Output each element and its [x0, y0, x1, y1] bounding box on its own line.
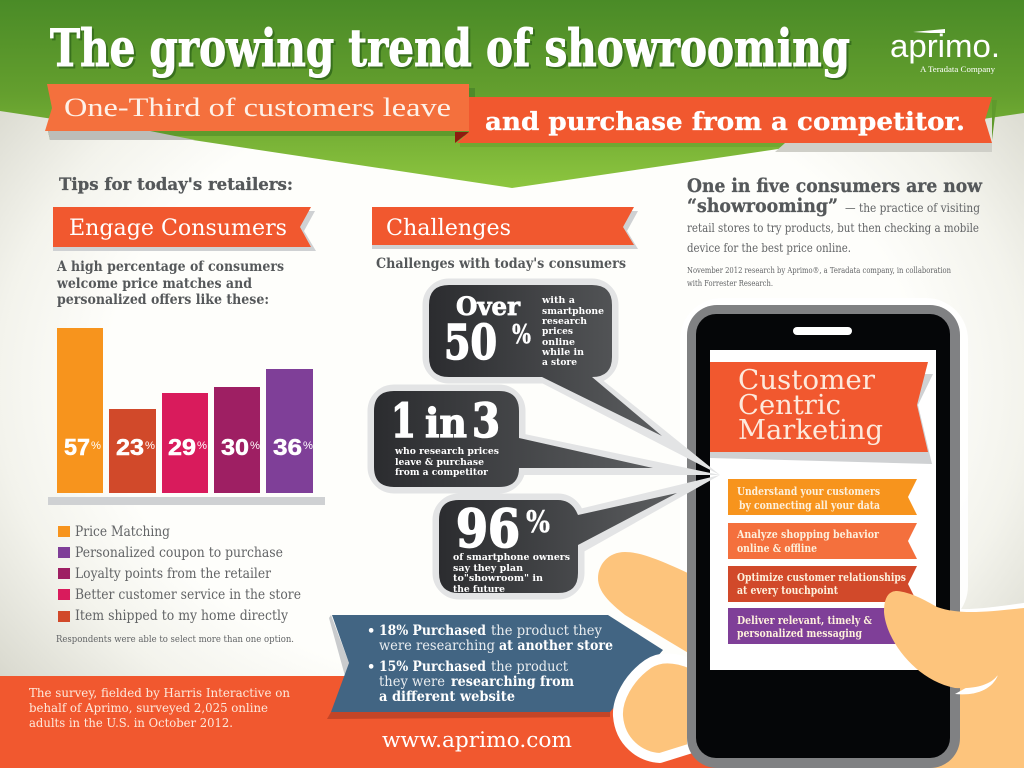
list item: deliver relevant messaging [728, 608, 917, 644]
logo: aprimo: aprimo. [890, 28, 1000, 64]
bar chart [48, 328, 325, 505]
hand: index finger [598, 552, 690, 654]
survey note: The survey, fielded by Harris Interactive on [29, 685, 290, 700]
blue callout: • [367, 624, 375, 639]
website: www.aprimo.com [382, 728, 572, 752]
banner: customer centric marketing [710, 362, 933, 464]
banner: and purchase from a competitor [455, 97, 997, 152]
subheading: challenges: Challenges with today's consumers [376, 256, 626, 272]
list item: analyze shopping behavior [728, 523, 917, 559]
text: engage intro [56, 259, 284, 308]
text: engage intro: personalized offers like these: [57, 292, 269, 308]
bar: 36%: 36 [273, 434, 302, 460]
heading: tips for retailers: Tips for today's retailers: [59, 175, 293, 195]
list item: optimize customer relationships: Optimize customer relationships [737, 571, 906, 584]
bubble: over 50%: smartphone [542, 306, 604, 317]
banner: customer centric marketing: Centric [738, 390, 841, 421]
hand: thumb [884, 591, 1024, 694]
bubble: over 50%: a store [542, 357, 577, 368]
phone screen [710, 350, 936, 670]
phone speaker [793, 327, 852, 335]
blue callout: the product they [491, 623, 602, 639]
logo: aprimo: A Teradata Company [920, 65, 995, 74]
bar: 29% [162, 393, 208, 493]
blue callout: the product [491, 659, 569, 675]
banner: customer centric marketing: Customer [738, 365, 875, 396]
banner: engage consumers: Engage Consumers [69, 216, 287, 241]
bubble: over 50%: Over [456, 292, 521, 321]
bar: 23%: % [145, 440, 155, 452]
list item: optimize customer relationships: at every touchpoint [737, 584, 839, 597]
blue callout: 18% Purchased [379, 623, 487, 639]
legend [58, 524, 301, 624]
bubble: over 50%: % [512, 320, 531, 350]
bubble: 1 in 3: who research prices [394, 446, 499, 457]
legend: Price Matching [75, 524, 170, 540]
bar: 57%: % [91, 440, 101, 452]
blue callout: were researching [379, 638, 495, 654]
list item: understand your customers: by connecting all your data [739, 499, 880, 512]
legend: Better customer service in the store [75, 587, 301, 603]
list item: deliver relevant messaging: Deliver relevant, timely & [737, 614, 872, 627]
blue callout: 15% Purchased [379, 659, 487, 675]
list item: optimize customer relationships [728, 566, 917, 602]
bar: 30%: 30 [221, 434, 249, 460]
intro: one in five [687, 175, 983, 289]
bubble: over 50%: research [542, 316, 587, 327]
intro: one in five: with Forrester Research. [687, 279, 773, 289]
list item: understand your customers [728, 479, 917, 515]
bubble: over 50%: 50 [444, 315, 497, 371]
intro: one in five: — the practice of visiting [845, 200, 980, 215]
banner: engage consumers [53, 207, 316, 251]
banner: customer centric marketing: Marketing [738, 415, 883, 446]
intro: one in five: “showrooming” [687, 195, 838, 217]
bar: 36%: % [303, 440, 313, 452]
bubble: over 50%: while in [541, 347, 584, 358]
bubble: over 50%: prices [542, 326, 573, 337]
blue callout: researching from [451, 674, 574, 690]
blue callout [327, 615, 663, 719]
text: engage intro: welcome price matches and [56, 276, 253, 292]
blue callout: a different website [379, 689, 515, 705]
intro: one in five: November 2012 research by Aprimo®, a Teradata company, in collaboration [687, 266, 951, 276]
blue callout: at another store [499, 638, 613, 654]
bar: 23%: 23 [116, 434, 144, 460]
bar: 23% [109, 409, 156, 493]
list item: deliver relevant messaging: personalized messaging [737, 627, 862, 640]
bar: 36% [266, 369, 313, 493]
text: engage intro: A high percentage of consumers [56, 259, 284, 275]
bar: 57%: 57 [64, 434, 90, 460]
list item: analyze shopping behavior: online & offline [737, 542, 817, 555]
bubble tails outline [515, 378, 720, 555]
bubble: 1 in 3: from a competitor [395, 467, 489, 478]
bubble: 96%: 96 [456, 499, 520, 560]
survey note: adults in the U.S. in October 2012. [29, 715, 233, 730]
bubble: 1 in 3: 3 [472, 394, 500, 449]
list item: understand your customers: Understand your customers [737, 485, 880, 498]
bar: 29%: 29 [168, 434, 196, 460]
banner: one-third of customers leave [45, 84, 475, 140]
list item: analyze shopping behavior: Analyze shopping behavior [736, 528, 879, 541]
survey note: behalf of Aprimo, surveyed 2,025 online [29, 700, 268, 715]
legend: Loyalty points from the retailer [75, 566, 271, 582]
blue callout: • [367, 660, 375, 675]
bubble: 96% [439, 493, 677, 595]
bubble: over 50%: with a [541, 295, 575, 306]
intro: one in five: device for the best price online. [687, 240, 851, 255]
intro: one in five: One in five consumers are now [687, 175, 983, 197]
bubble: over 50% [429, 285, 662, 436]
hand: palm [900, 606, 1024, 768]
phone halo [680, 298, 968, 628]
bubble: 1 in 3 [374, 391, 653, 487]
phone [687, 305, 960, 768]
bubble: 96%: say they plan [453, 563, 523, 574]
banner: and purchase from a competitor: and purchase from a competitor. [485, 107, 965, 136]
bubble: 96%: % [526, 505, 550, 540]
legend: Item shipped to my home directly [75, 608, 288, 624]
bar: 29%: % [197, 440, 207, 452]
hand: lower finger [618, 658, 692, 758]
bubble: 96%: the future [453, 584, 505, 595]
bubble: over 50%: online [542, 337, 575, 348]
banner: one-third of customers leave: One-Third of customers leave [64, 93, 451, 122]
banner: challenges: Challenges [386, 216, 511, 241]
bar: 57% [57, 328, 103, 493]
bubble: 96%: of smartphone owners [453, 552, 570, 563]
header green arrow panel [0, 0, 1024, 188]
bubble: 1 in 3: 1 [391, 394, 416, 449]
survey note [29, 685, 290, 730]
bar: 30%: % [250, 440, 260, 452]
bubble: 96%: to"showroom" in [453, 573, 543, 584]
blue callout: they were [379, 674, 445, 690]
bubble: 1 in 3: leave & purchase [395, 457, 484, 468]
bar: 30% [214, 387, 260, 493]
bubble: 1 in 3: in [425, 400, 467, 447]
legend: Personalized coupon to purchase [75, 545, 283, 561]
footer band [0, 676, 1024, 768]
banner: challenges [372, 207, 638, 249]
legend note: Respondents were able to select more than one option. [56, 634, 294, 645]
